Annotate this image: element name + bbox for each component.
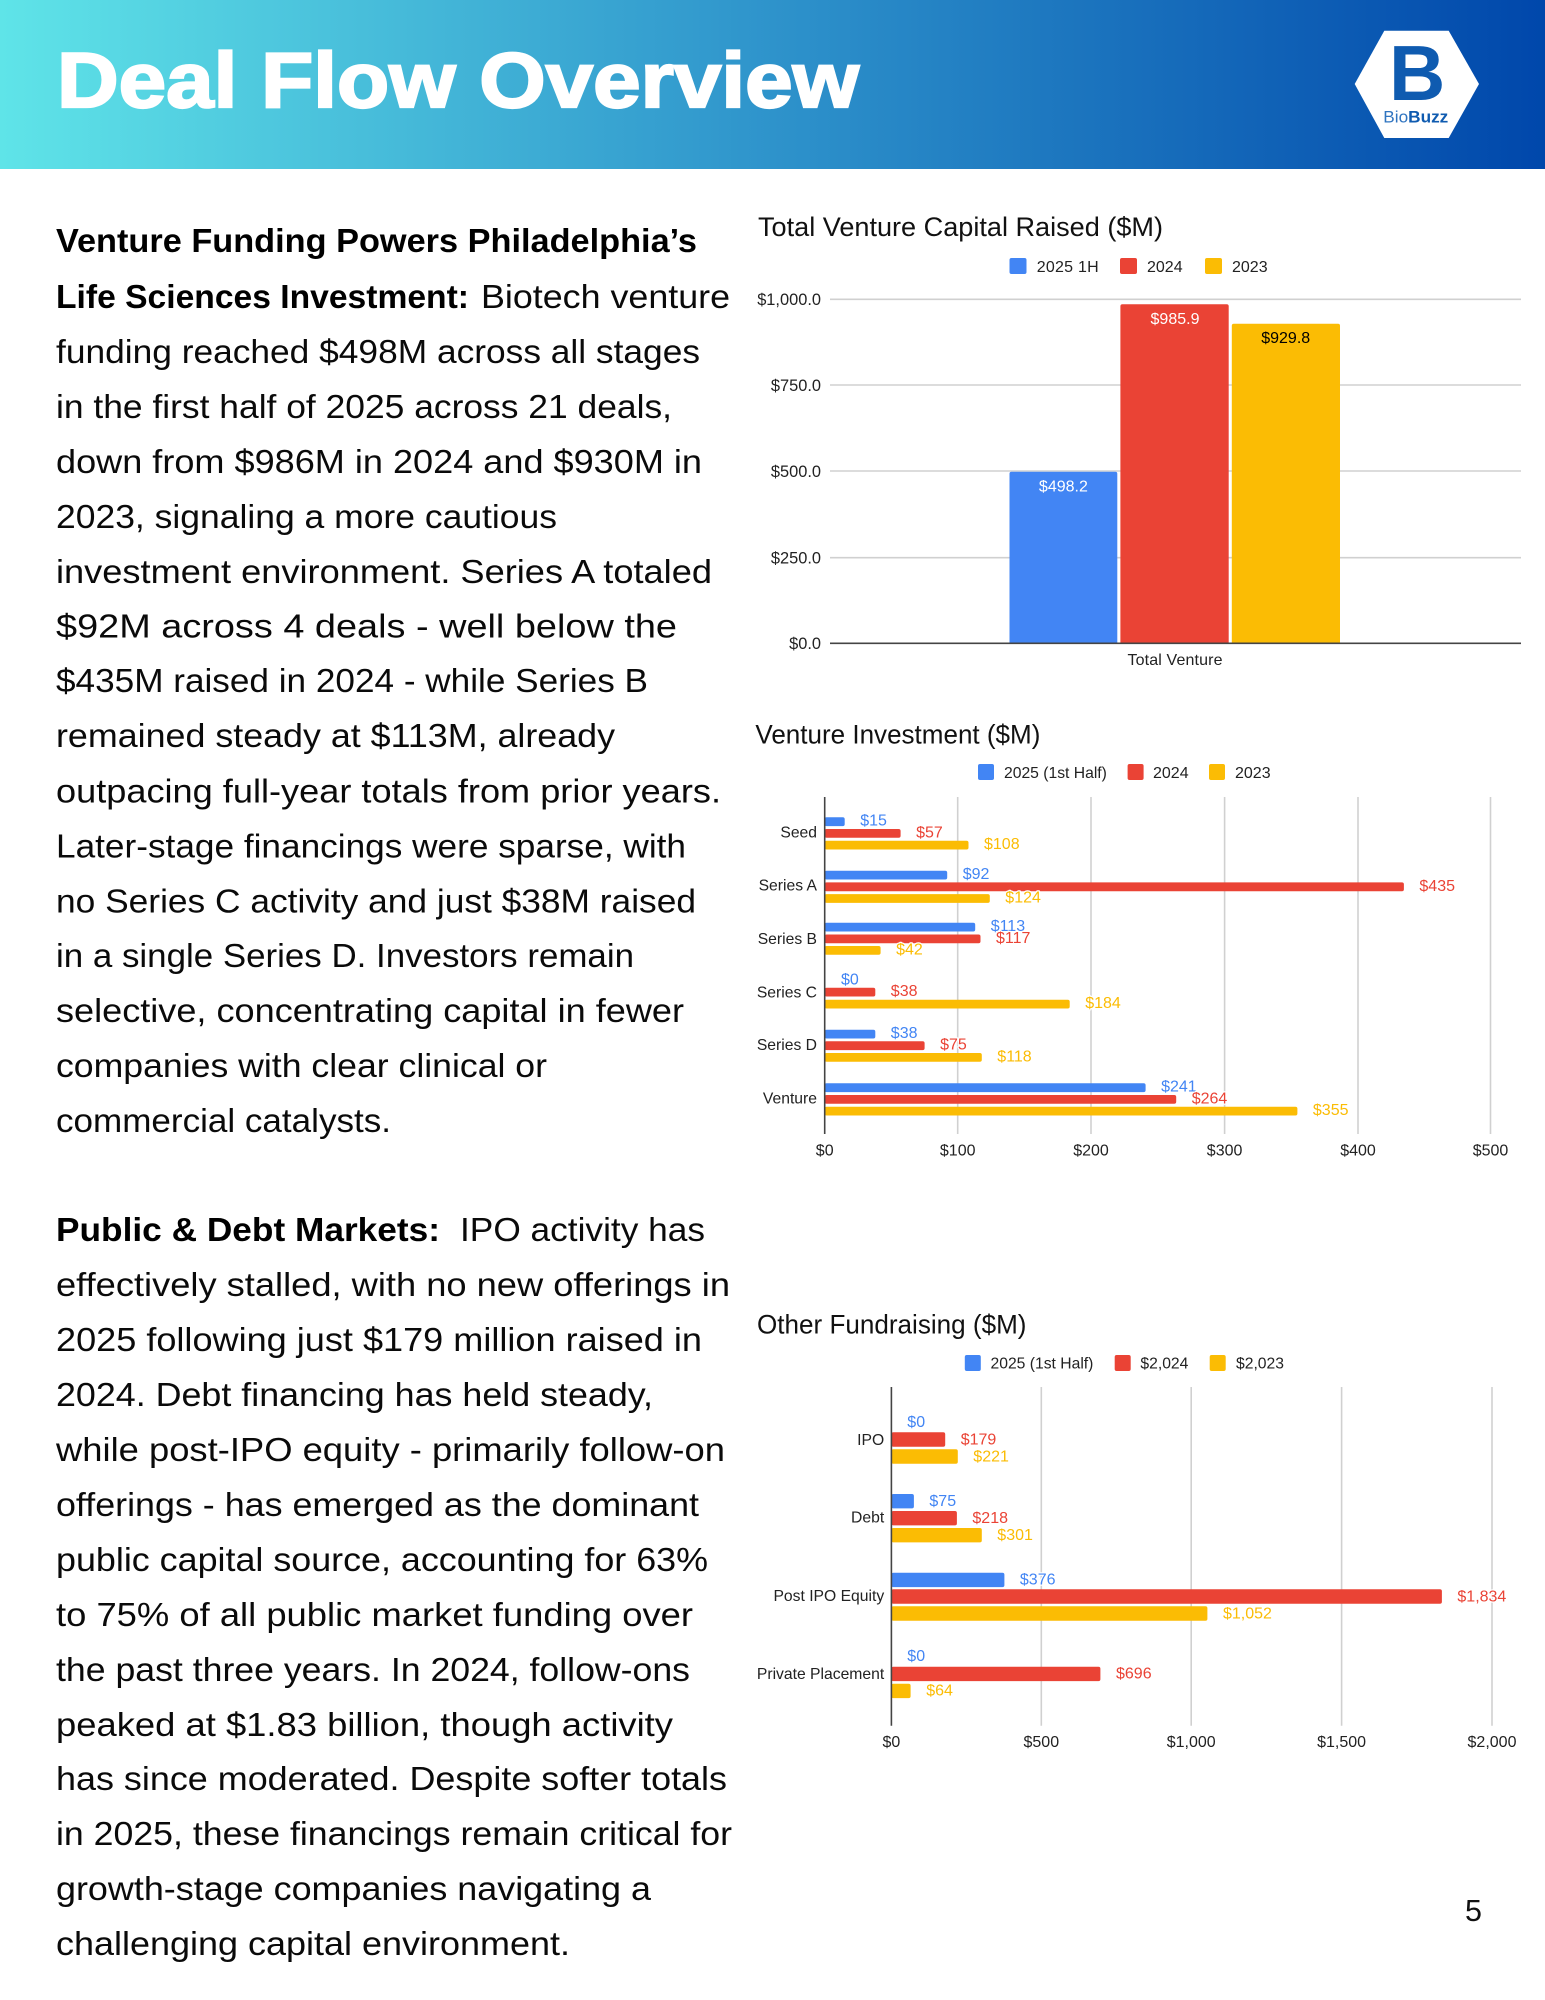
text block: venture funding: $92M across 4 deals - well below the bbox=[56, 607, 677, 644]
category labels bbox=[757, 1432, 885, 1683]
chart title: Total Venture Capital Raised ($M) bbox=[758, 212, 1163, 242]
text block: public and debt markets: Public & Debt Markets: bbox=[56, 1211, 440, 1248]
text block: venture funding: 2023, signaling a more cautious bbox=[56, 498, 557, 535]
legend: 2025 1H bbox=[1037, 259, 1099, 276]
y axis labels: $1,000.0 bbox=[757, 291, 821, 309]
value labels: $179 bbox=[961, 1431, 996, 1448]
text block: venture funding: no Series C activity and just $38M raised bbox=[56, 882, 696, 919]
text block: public and debt markets: in 2025, these financings remain critical for bbox=[56, 1815, 732, 1852]
value labels: $376 bbox=[1020, 1572, 1056, 1589]
text block: venture funding: down from $986M in 2024 and $930M in bbox=[56, 443, 702, 480]
text block: venture funding: investment environment. Series A totaled bbox=[56, 553, 712, 590]
text block: public and debt markets: the past three years. In 2024, follow-ons bbox=[56, 1651, 690, 1688]
x axis labels: $100 bbox=[940, 1142, 976, 1159]
page number: 5 bbox=[1465, 1894, 1482, 1928]
value labels: $113 bbox=[991, 918, 1025, 935]
y axis labels: $0.0 bbox=[789, 635, 821, 653]
chart: total venture capital raised bbox=[757, 212, 1521, 669]
category labels: Series B bbox=[758, 931, 817, 948]
bars bbox=[1010, 304, 1340, 643]
legend: $2,024 bbox=[1140, 1356, 1189, 1372]
text block: venture funding: in a single Series D. Investors remain bbox=[56, 937, 634, 974]
legend bbox=[965, 1355, 1284, 1372]
text block: public and debt markets: 2024. Debt financing has held steady, bbox=[56, 1376, 653, 1413]
chart: other fundraising bbox=[757, 1310, 1517, 1751]
x axis labels: $200 bbox=[1073, 1142, 1109, 1159]
text block: public and debt markets: public capital source, accounting for 63% bbox=[56, 1541, 708, 1578]
legend: 2024 bbox=[1147, 259, 1183, 276]
legend: $2,023 bbox=[1236, 1356, 1284, 1372]
value labels: $38 bbox=[891, 983, 918, 1000]
bars bbox=[891, 1432, 1442, 1698]
category labels: Series A bbox=[759, 878, 818, 895]
text block: public and debt markets: has since moderated. Despite softer totals bbox=[56, 1760, 727, 1797]
legend bbox=[1010, 258, 1268, 276]
text block: public and debt markets: IPO activity has bbox=[460, 1211, 705, 1248]
value labels: $264 bbox=[1192, 1090, 1227, 1107]
logo: BioBuzz hexagon bbox=[1355, 29, 1479, 138]
legend: 2023 bbox=[1235, 765, 1271, 782]
text block: public and debt markets: growth-stage companies navigating a bbox=[56, 1870, 652, 1907]
text block: venture funding bbox=[56, 222, 730, 1139]
bar value labels: $929.8 bbox=[1261, 330, 1310, 347]
category labels bbox=[757, 825, 818, 1107]
category labels: Private Placement bbox=[757, 1666, 885, 1683]
x axis labels: $2,000 bbox=[1468, 1734, 1517, 1751]
text block: venture funding: selective, concentrating capital in fewer bbox=[56, 992, 684, 1029]
value labels: $64 bbox=[926, 1683, 953, 1700]
value labels: $75 bbox=[940, 1037, 967, 1054]
text block: venture funding: outpacing full-year totals from prior years. bbox=[56, 772, 721, 809]
text block: venture funding: remained steady at $113M, already bbox=[56, 717, 616, 754]
category labels: Post IPO Equity bbox=[773, 1588, 884, 1605]
x axis labels: $400 bbox=[1340, 1142, 1376, 1159]
category labels: IPO bbox=[857, 1432, 884, 1449]
x axis labels: $1,000 bbox=[1167, 1734, 1216, 1751]
text block: public and debt markets: offerings - has emerged as the dominant bbox=[56, 1486, 699, 1523]
value labels: $0 bbox=[907, 1414, 925, 1431]
legend bbox=[978, 764, 1271, 782]
legend: 2023 bbox=[1232, 259, 1268, 276]
y axis labels: $250.0 bbox=[771, 549, 821, 567]
value labels: $696 bbox=[1116, 1666, 1152, 1683]
value labels: $15 bbox=[860, 813, 887, 830]
header banner bbox=[0, 0, 1545, 169]
value labels: $1,052 bbox=[1223, 1605, 1272, 1622]
value labels: $355 bbox=[1313, 1102, 1349, 1119]
bar value labels bbox=[1039, 311, 1310, 496]
x axis labels: $500 bbox=[1473, 1142, 1508, 1159]
text block: venture funding: Later-stage financings were sparse, with bbox=[56, 827, 686, 864]
y axis labels: $750.0 bbox=[771, 377, 821, 395]
value labels: $241 bbox=[1161, 1079, 1197, 1096]
x axis labels: $300 bbox=[1207, 1142, 1242, 1159]
text block: public and debt markets bbox=[55, 1211, 732, 1962]
x axis labels: $1,500 bbox=[1317, 1734, 1366, 1751]
chart: venture investment bbox=[755, 720, 1508, 1159]
value labels: $0 bbox=[841, 971, 859, 988]
value labels: $118 bbox=[997, 1048, 1032, 1065]
logo: BioBuzz hexagon: BioBuzz bbox=[1383, 108, 1448, 127]
value labels: $117 bbox=[996, 930, 1031, 947]
text block: public and debt markets: peaked at $1.83 billion, though activity bbox=[56, 1706, 674, 1743]
category labels: Venture bbox=[763, 1090, 817, 1107]
value labels: $108 bbox=[984, 836, 1020, 853]
text block: venture funding: companies with clear clinical or bbox=[56, 1047, 547, 1084]
value labels: $124 bbox=[1005, 890, 1041, 906]
text block: venture funding: Life Sciences Investment: bbox=[56, 278, 469, 315]
text block: venture funding: Venture Funding Powers Philadelphia’s bbox=[56, 222, 697, 259]
bar value labels: $985.9 bbox=[1151, 311, 1200, 328]
legend: 2025 (1st Half) bbox=[1004, 765, 1107, 782]
value labels bbox=[907, 1414, 1506, 1700]
category labels: Series C bbox=[757, 984, 817, 1001]
y axis labels: $500.0 bbox=[771, 463, 821, 481]
value labels: $221 bbox=[973, 1448, 1009, 1465]
text block: venture funding: funding reached $498M across all stages bbox=[56, 333, 700, 370]
text block: public and debt markets: to 75% of all public market funding over bbox=[56, 1596, 693, 1633]
legend: 2025 (1st Half) bbox=[990, 1356, 1093, 1372]
text block: venture funding: Biotech venture bbox=[481, 278, 730, 315]
text block: public and debt markets: effectively stalled, with no new offerings in bbox=[56, 1266, 730, 1303]
text block: venture funding: in the first half of 2025 across 21 deals, bbox=[56, 388, 672, 425]
x axis labels: $0 bbox=[816, 1142, 834, 1159]
x axis label: Total Venture bbox=[1128, 652, 1223, 669]
value labels: $435 bbox=[1419, 878, 1455, 895]
text block: public and debt markets: challenging capital environment. bbox=[56, 1925, 570, 1962]
y axis labels bbox=[757, 291, 821, 653]
x axis labels bbox=[816, 1142, 1508, 1159]
legend: 2024 bbox=[1153, 765, 1189, 782]
bars bbox=[825, 817, 1404, 1116]
text block: public and debt markets: while post-IPO equity - primarily follow-on bbox=[55, 1431, 725, 1468]
chart title: Other Fundraising ($M) bbox=[757, 1310, 1026, 1340]
x axis labels: $500 bbox=[1024, 1734, 1059, 1751]
value labels: $301 bbox=[997, 1527, 1033, 1544]
category labels: Debt bbox=[851, 1509, 885, 1526]
value labels bbox=[841, 813, 1455, 1119]
x axis labels: $0 bbox=[883, 1734, 900, 1751]
value labels: $0 bbox=[907, 1648, 925, 1665]
category labels: Seed bbox=[780, 825, 817, 842]
bar value labels: $498.2 bbox=[1039, 478, 1088, 496]
value labels: $75 bbox=[929, 1493, 956, 1510]
value labels: $42 bbox=[896, 941, 923, 958]
x axis labels bbox=[883, 1734, 1517, 1751]
logo: BioBuzz hexagon: B bbox=[1389, 29, 1445, 117]
text block: public and debt markets: 2025 following just $179 million raised in bbox=[56, 1321, 702, 1358]
text block: venture funding: commercial catalysts. bbox=[56, 1102, 391, 1139]
value labels: $57 bbox=[916, 824, 943, 841]
value labels: $38 bbox=[891, 1025, 918, 1042]
chart title: Venture Investment ($M) bbox=[755, 720, 1040, 750]
title: Deal Flow Overview bbox=[57, 36, 859, 124]
value labels: $218 bbox=[972, 1510, 1008, 1527]
value labels: $92 bbox=[963, 866, 989, 883]
value labels: $1,834 bbox=[1457, 1588, 1506, 1605]
category labels: Series D bbox=[757, 1037, 817, 1054]
text block: venture funding: $435M raised in 2024 - while Series B bbox=[56, 662, 648, 699]
value labels: $184 bbox=[1085, 995, 1121, 1012]
